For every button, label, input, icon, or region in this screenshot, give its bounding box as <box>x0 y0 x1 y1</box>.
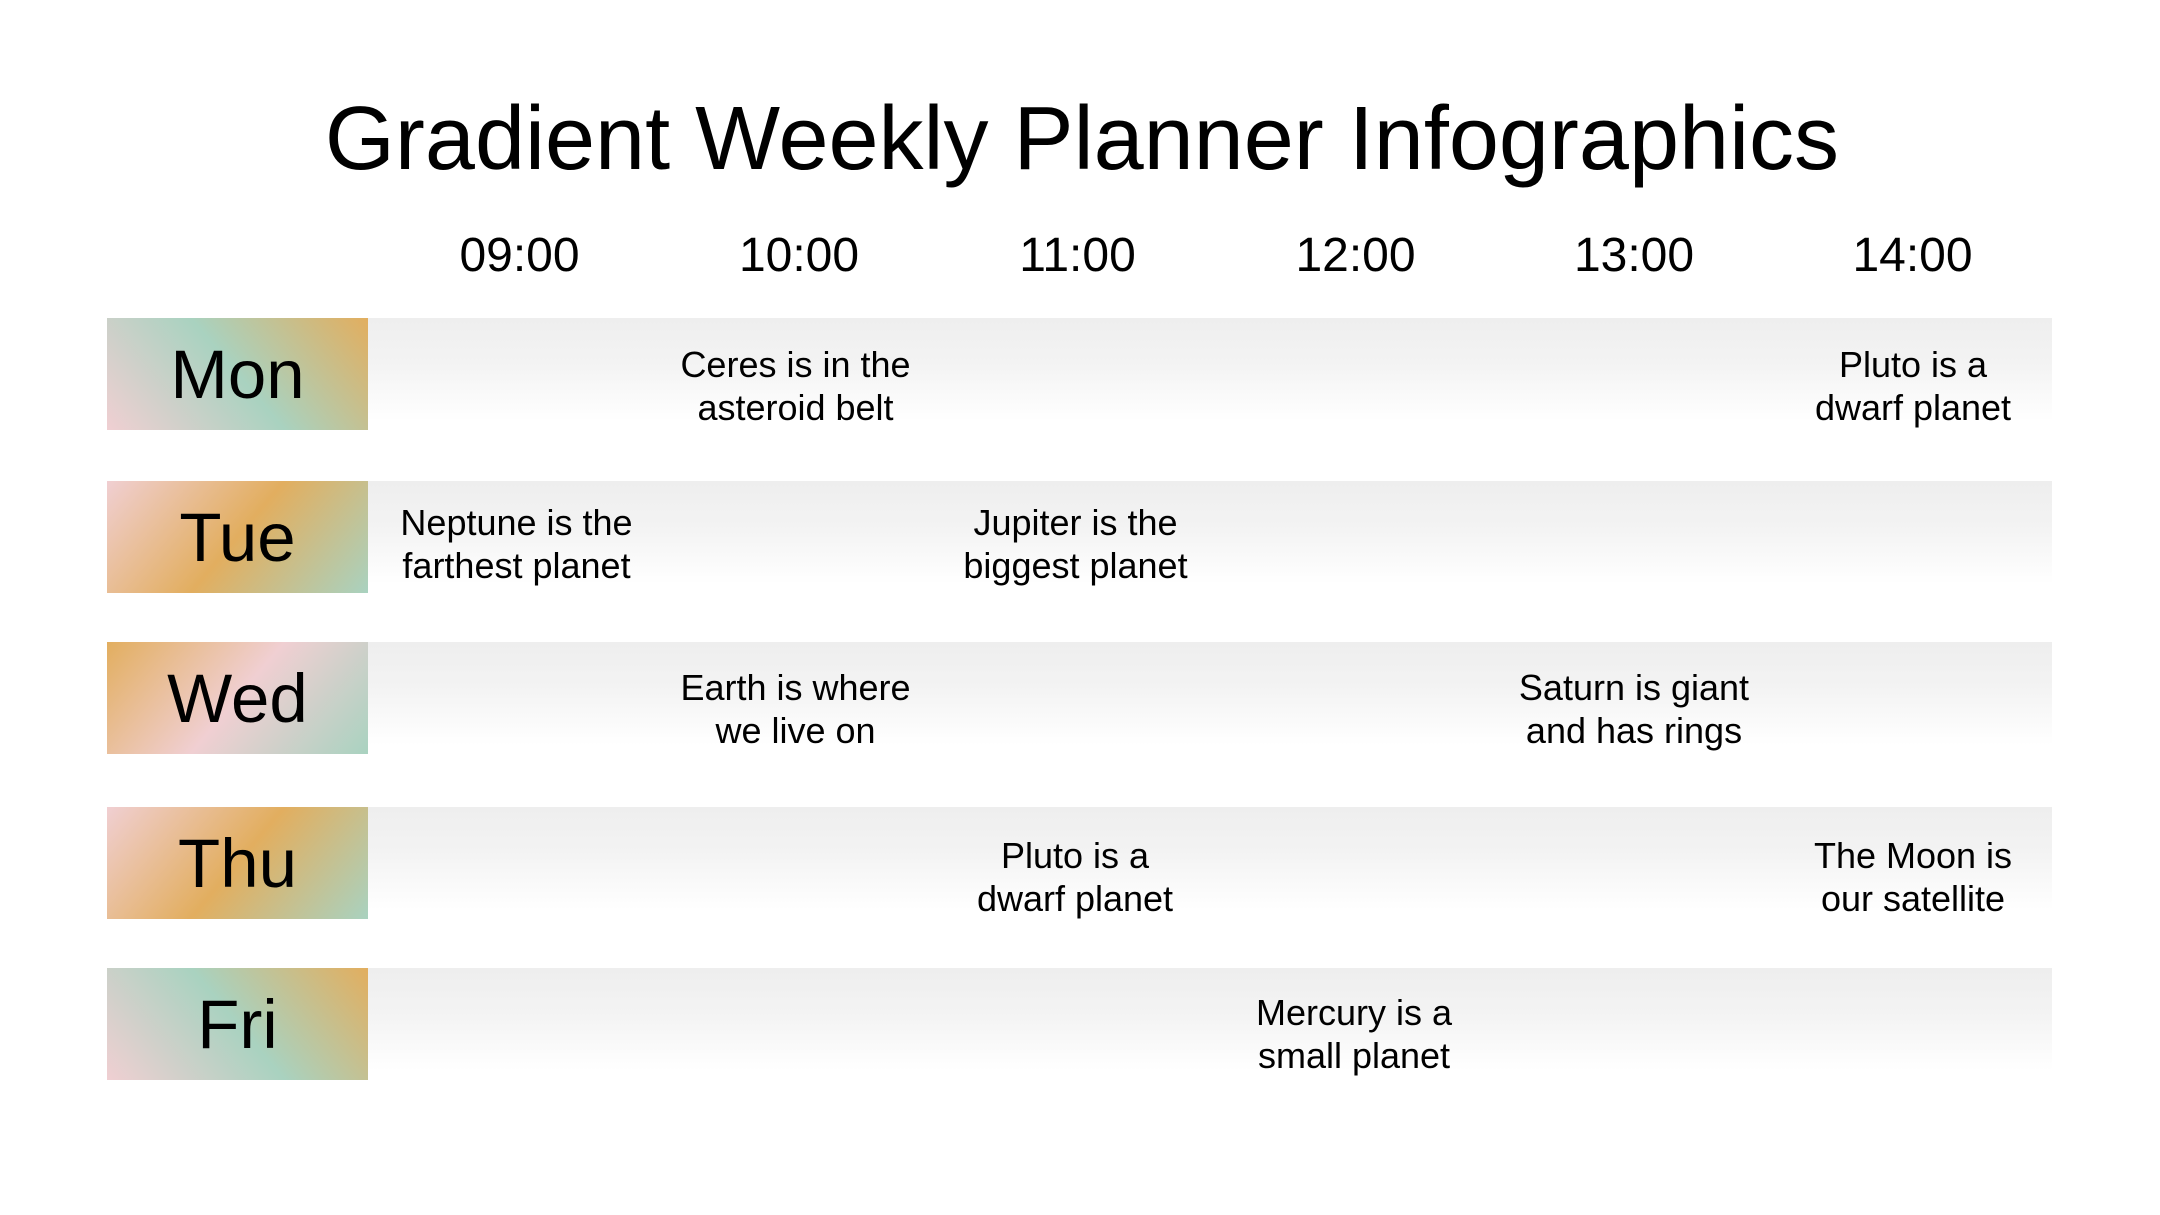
task: Saturn: Saturn is giant <box>1519 666 1749 708</box>
task: Moon <box>1814 835 2012 919</box>
task: Pluto Monday: dwarf planet <box>1815 387 2011 428</box>
task: Earth <box>680 666 911 751</box>
task: Jupiter <box>963 502 1188 586</box>
day label: Mon: Mon <box>170 336 305 413</box>
task: Earth: we live on <box>715 710 876 751</box>
row band: Wednesday <box>368 642 2052 754</box>
time label 11:00: 11:00 <box>1019 229 1136 282</box>
task: Jupiter: biggest planet <box>963 545 1188 586</box>
task: Ceres: Ceres is in the <box>680 344 911 385</box>
task: Saturn: and has rings <box>1526 710 1742 751</box>
task: Neptune: farthest planet <box>402 545 631 586</box>
time label 09:00: 09:00 <box>459 229 580 282</box>
task: Mercury: Mercury is a <box>1256 992 1452 1032</box>
day label: Fri: Fri <box>197 986 278 1063</box>
day label: Mon <box>107 318 368 430</box>
day label: Fri <box>107 968 368 1080</box>
day label: Thu <box>107 807 368 918</box>
task: Ceres <box>680 344 911 428</box>
row band: Monday <box>368 318 2052 430</box>
task: Moon: our satellite <box>1821 878 2005 919</box>
title: Gradient Weekly Planner Infographics <box>325 89 1839 189</box>
time label 12:00: 12:00 <box>1295 229 1416 282</box>
time label 14:00: 14:00 <box>1852 229 1973 282</box>
task: Pluto Thursday <box>977 835 1173 919</box>
day label: Wed: Wed <box>167 660 308 737</box>
time label 13:00: 13:00 <box>1574 229 1694 282</box>
task: Saturn <box>1519 666 1749 751</box>
task: Mercury: small planet <box>1258 1035 1450 1076</box>
time label 10:00: 10:00 <box>739 229 859 282</box>
task: Jupiter: Jupiter is the <box>973 502 1178 543</box>
task: Pluto Monday: Pluto is a <box>1839 344 1987 385</box>
task: Neptune <box>400 502 633 586</box>
task: Ceres: asteroid belt <box>697 387 894 428</box>
task: Earth: Earth is where <box>680 666 911 708</box>
row band: Thursday <box>368 807 2052 919</box>
row band: Friday <box>368 968 2052 1080</box>
row band: Tuesday <box>368 481 2052 593</box>
day label: Wed <box>107 642 368 754</box>
task: Neptune: Neptune is the <box>400 502 633 543</box>
task: Pluto Thursday: dwarf planet <box>977 878 1173 919</box>
day label: Thu: Thu <box>178 825 297 902</box>
day label: Tue: Tue <box>179 499 296 576</box>
task: Pluto Monday <box>1815 344 2011 428</box>
day label: Tue <box>107 481 368 592</box>
task: Mercury <box>1256 992 1452 1076</box>
task: Pluto Thursday: Pluto is a <box>1001 835 1149 876</box>
task: Moon: The Moon is <box>1814 835 2012 876</box>
